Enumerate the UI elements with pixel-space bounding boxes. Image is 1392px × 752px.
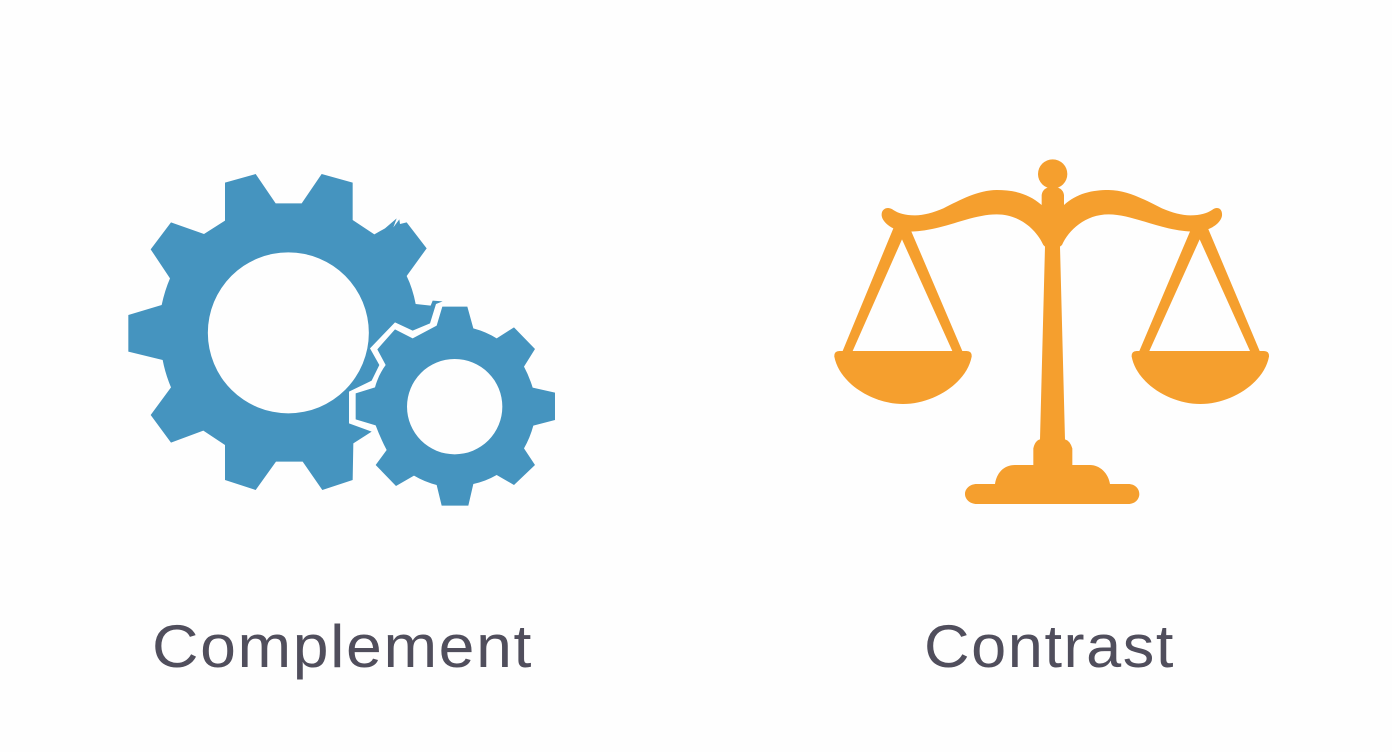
small gear: [356, 307, 555, 506]
icon: interlocking gears: [128, 174, 555, 506]
panel: complement: [128, 174, 555, 680]
label: Complement: Complement: [152, 613, 533, 680]
left pan: [834, 351, 972, 404]
top ball: [1038, 159, 1067, 189]
panel: contrast: [834, 159, 1269, 680]
right pan strings: [1138, 228, 1261, 353]
right pan: [1132, 351, 1269, 404]
beam, column and base: [882, 187, 1222, 504]
large gear: [128, 174, 443, 490]
icon: balance scale: [834, 159, 1269, 504]
left pan strings: [842, 228, 963, 353]
label: Contrast: Contrast: [924, 613, 1175, 680]
